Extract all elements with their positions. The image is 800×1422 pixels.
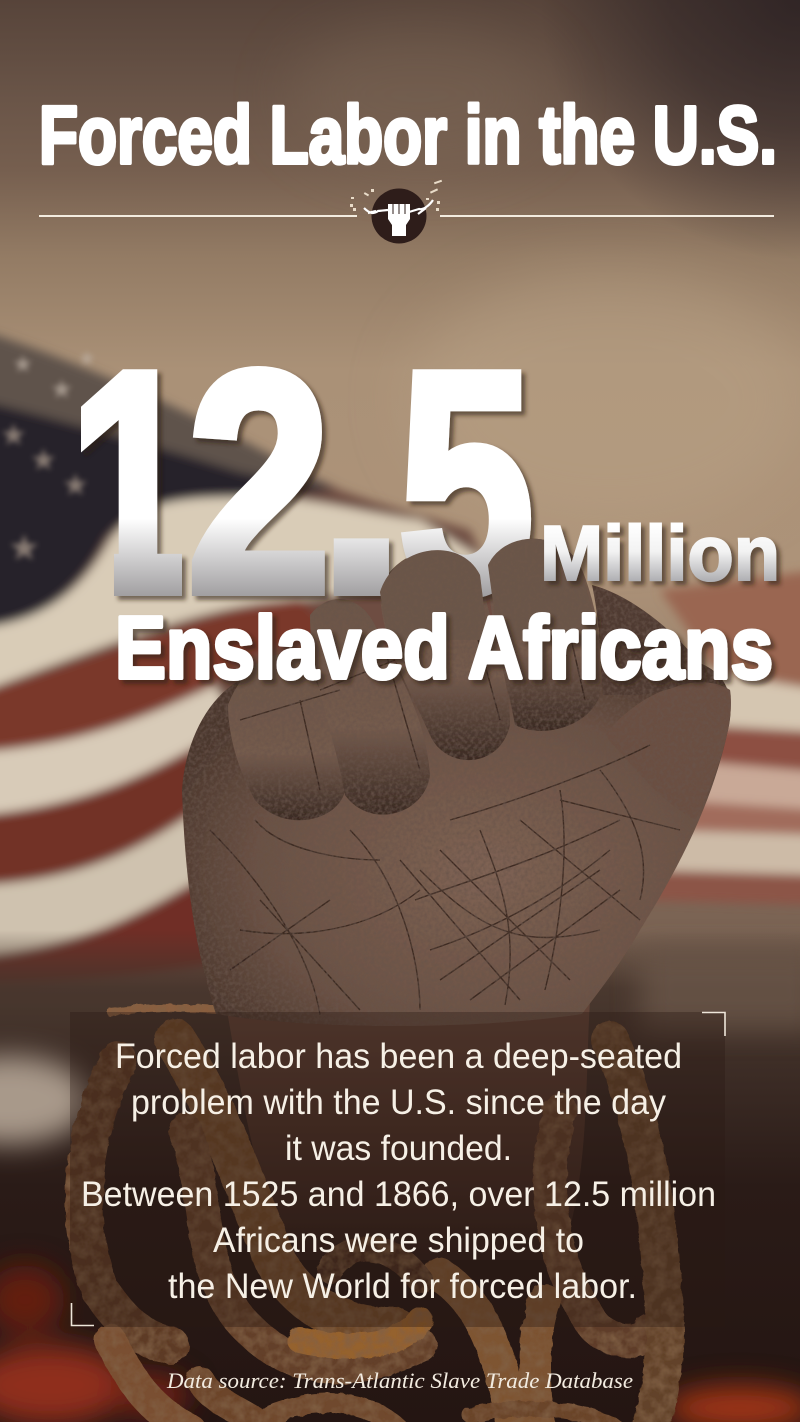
description text: it was founded. [285, 1129, 512, 1168]
american flag [0, 330, 800, 1000]
little ring [592, 585, 705, 695]
flag stars: ★ [12, 351, 34, 378]
panel: description [70, 1012, 725, 1327]
palm creases [210, 590, 680, 1015]
flag stars: ★ [62, 469, 89, 502]
description text: the New World for forced labor. [168, 1267, 637, 1306]
big number 12.5: 1 [69, 306, 196, 658]
palm [182, 640, 731, 1026]
data source: Data source: Trans-Atlantic Slave Trade Database [166, 1368, 633, 1393]
flag stars: ★ [8, 527, 40, 568]
fire glow [0, 1265, 800, 1422]
description text [81, 1037, 716, 1306]
corner mark top right [702, 1012, 725, 1036]
corner mark bottom left [72, 1303, 94, 1326]
flag stars [0, 348, 96, 568]
description text: problem with the U.S. since the day [131, 1083, 666, 1122]
big number 12.5 [81, 366, 538, 604]
rusty chains [84, 1008, 665, 1422]
big number 12.5: 5 [398, 306, 534, 658]
finger 1 [228, 654, 345, 820]
icon: fist breaking chains [350, 180, 442, 244]
arm and wrist [225, 1000, 590, 1260]
finger 2 [310, 599, 430, 815]
big number 12.5: . [317, 301, 406, 659]
raised fist [182, 539, 731, 1026]
flag stars: ★ [78, 348, 96, 370]
Million label: Million [540, 509, 780, 597]
thumb [605, 682, 731, 820]
description text: Between 1525 and 1866, over 12.5 million [81, 1175, 716, 1214]
title rule left [39, 215, 357, 217]
flag stars: ★ [30, 444, 57, 477]
description text: Forced labor has been a deep-seated [115, 1037, 682, 1076]
big number 12.5: 2 [187, 306, 331, 658]
panel backing [70, 1012, 725, 1327]
flag stars: ★ [0, 419, 27, 452]
finger 3 [380, 550, 510, 760]
lower haze and clouds [0, 930, 800, 1422]
flag stars: ★ [50, 374, 73, 404]
finger 4 [488, 539, 602, 731]
description text: Africans were shipped to [213, 1221, 584, 1260]
title rule right [440, 215, 774, 217]
finger tips overlapping number [380, 539, 600, 640]
